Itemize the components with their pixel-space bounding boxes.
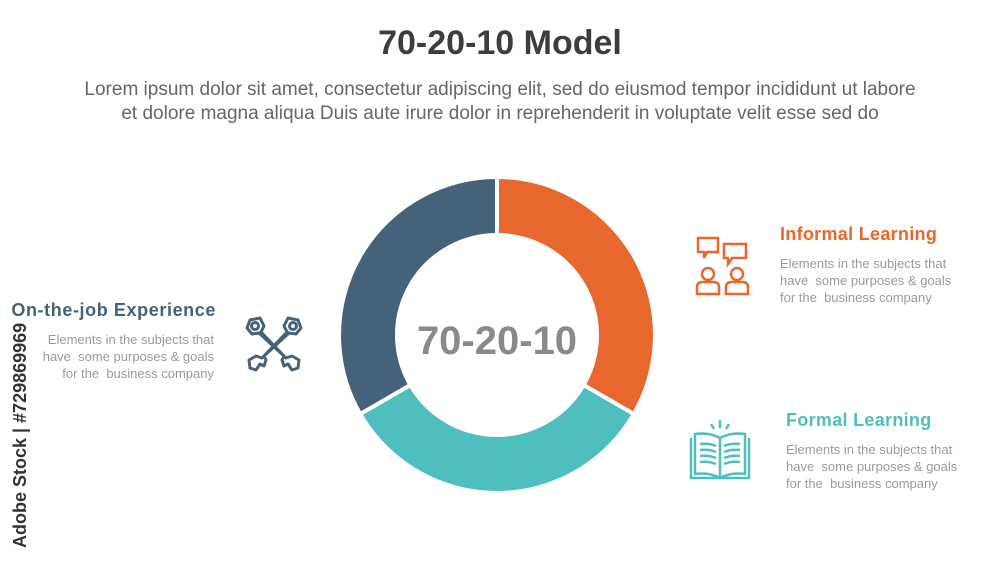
panel: formal learning: have some purposes & goals [786, 459, 957, 474]
panel: on-the-job: Elements in the subjects that [48, 332, 214, 347]
panel: on-the-job [11, 300, 216, 381]
panel: informal learning: for the business company [780, 290, 932, 305]
icon: people chat [696, 236, 750, 296]
panel: informal learning: Informal Learning [780, 224, 937, 244]
panel: informal learning: Elements in the subjects that [780, 256, 946, 271]
title: 70-20-10 Model [378, 24, 622, 62]
icon: open book [690, 420, 750, 480]
panel: informal learning: have some purposes & goals [780, 273, 951, 288]
panel: formal learning [786, 410, 957, 491]
panel: on-the-job: for the business company [62, 366, 214, 381]
panel: formal learning: for the business company [786, 476, 938, 491]
icon: wrench [246, 316, 302, 372]
watermark vertical text: Adobe Stock | #729869969 [10, 323, 30, 548]
subtitle text [84, 79, 916, 124]
panel: informal learning [780, 224, 951, 305]
panel: formal learning: Elements in the subjects that [786, 442, 952, 457]
subtitle text: et dolore magna aliqua Duis aute irure dolor in reprehenderit in voluptate velit esse sed do [121, 103, 879, 124]
panel: on-the-job: On-the-job Experience [11, 300, 216, 320]
panel: on-the-job: have some purposes & goals [43, 349, 214, 364]
subtitle text: Lorem ipsum dolor sit amet, consectetur adipiscing elit, sed do eiusmod tempor incididunt ut labore [84, 79, 916, 100]
donut chart: 70-20-10 [417, 319, 577, 363]
panel: formal learning: Formal Learning [786, 410, 932, 430]
